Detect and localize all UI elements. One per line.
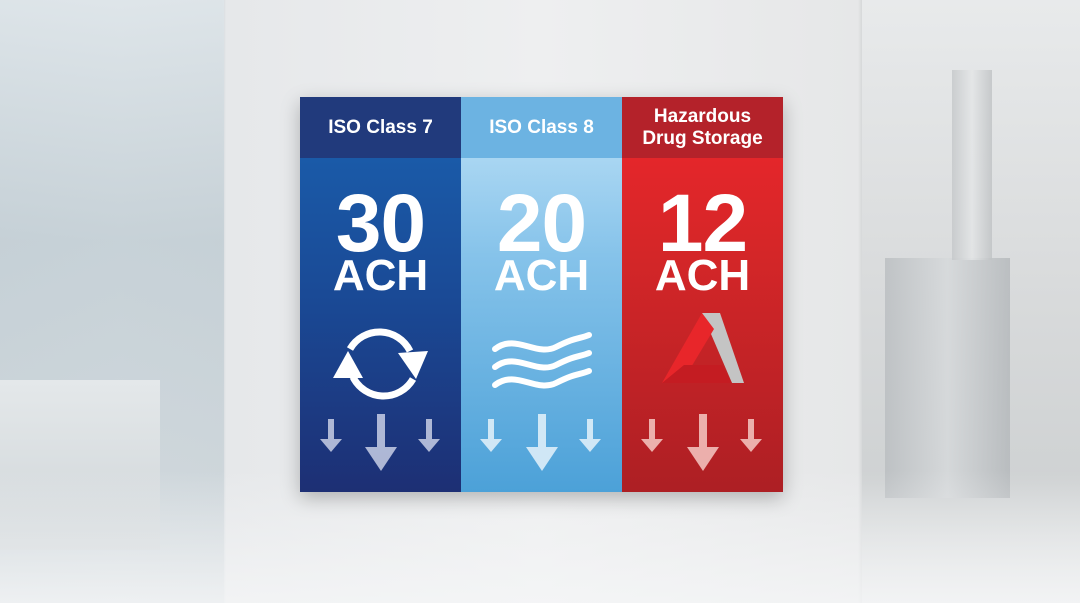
icon: hazard triangle — [641, 313, 762, 471]
heading: ISO Class 7 — [328, 116, 433, 138]
panel: Hazardous Drug Storage — [622, 97, 783, 492]
heading — [300, 97, 461, 158]
shadow of sign — [300, 97, 783, 492]
unit: ACH — [655, 251, 750, 300]
unit: ACH — [333, 251, 428, 300]
heading — [622, 97, 783, 158]
number: 20 — [497, 178, 586, 269]
icon: air waves — [480, 332, 601, 471]
background: right lab equipment — [862, 0, 1080, 603]
heading: ISO Class 8 — [489, 116, 594, 138]
panel: ISO Class 8 — [461, 97, 622, 492]
heading: Drug Storage — [642, 128, 763, 148]
icon: recycle arrows — [320, 328, 440, 471]
heading: Hazardous — [654, 106, 751, 126]
background: left lab benches — [0, 380, 160, 550]
background: left glass lab area — [0, 0, 224, 603]
number: 30 — [336, 178, 425, 269]
heading — [461, 97, 622, 158]
number: 12 — [658, 178, 747, 269]
unit: ACH — [494, 251, 589, 300]
panel: ISO Class 7 — [300, 97, 461, 492]
